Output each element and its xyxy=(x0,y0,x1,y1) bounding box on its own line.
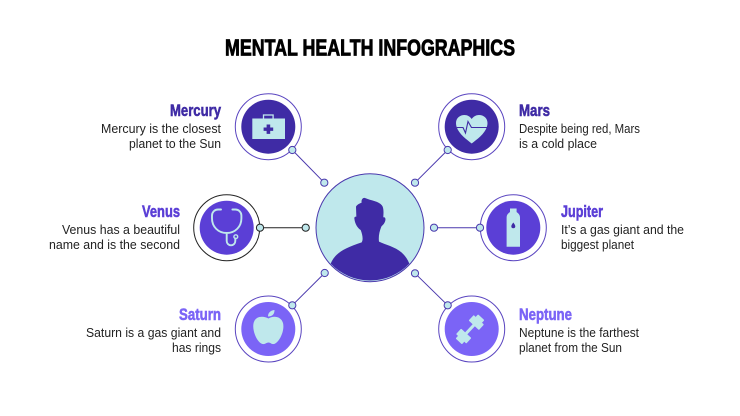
text: Neptune: Neptune is the farthest xyxy=(519,325,639,340)
icon: dumbbell xyxy=(439,296,505,362)
text: Saturn xyxy=(86,325,221,355)
text: Neptune xyxy=(519,325,639,355)
heading: Saturn: Saturn xyxy=(179,305,221,324)
text: Venus xyxy=(49,222,180,252)
panel: Jupiter xyxy=(430,195,684,261)
icon: person silhouette xyxy=(331,198,409,281)
heading: Neptune: Neptune xyxy=(519,305,572,324)
icon: heart with pulse xyxy=(439,94,505,160)
panel: Neptune xyxy=(411,270,639,362)
text: Saturn: Saturn is a gas giant and xyxy=(86,325,221,340)
text: Mars xyxy=(519,121,640,151)
text: Mars: Despite being red, Mars xyxy=(519,121,640,136)
text: Jupiter: biggest planet xyxy=(561,237,634,252)
icon: water bottle xyxy=(476,195,546,261)
connector: Mars xyxy=(411,150,448,186)
title: MENTAL HEALTH INFOGRAPHICS xyxy=(225,34,515,60)
heading: Mars: Mars xyxy=(519,101,550,120)
text: Saturn: has rings xyxy=(172,340,221,355)
text: Mercury: Mercury is the closest xyxy=(101,121,221,136)
panel: Saturn xyxy=(86,269,328,362)
text: Mercury xyxy=(101,121,221,151)
connector: Mercury xyxy=(292,150,328,186)
icon: stethoscope xyxy=(194,195,264,261)
panel: Mars xyxy=(411,94,640,186)
connector: Jupiter xyxy=(430,224,480,231)
text: Mercury: planet to the Sun xyxy=(129,136,221,151)
text: Neptune: planet from the Sun xyxy=(519,340,622,355)
heading: Jupiter: Jupiter xyxy=(561,202,603,221)
icon: first aid kit xyxy=(235,94,301,160)
panel: Mercury xyxy=(101,94,328,186)
connector: Saturn xyxy=(292,269,328,305)
connector: Neptune xyxy=(411,270,448,305)
panel: Venus xyxy=(49,195,309,261)
heading: Mercury: Mercury xyxy=(170,101,221,120)
icon: apple xyxy=(235,296,301,362)
heading: Venus: Venus xyxy=(142,202,180,221)
text: Venus: name and is the second xyxy=(49,237,180,252)
text: Jupiter xyxy=(561,222,684,252)
text: Mars: is a cold place xyxy=(519,136,597,151)
connector: Venus xyxy=(260,224,309,231)
central figure xyxy=(316,174,424,282)
text: Venus: Venus has a beautiful xyxy=(62,222,180,237)
text: Jupiter: It’s a gas giant and the xyxy=(561,222,684,237)
